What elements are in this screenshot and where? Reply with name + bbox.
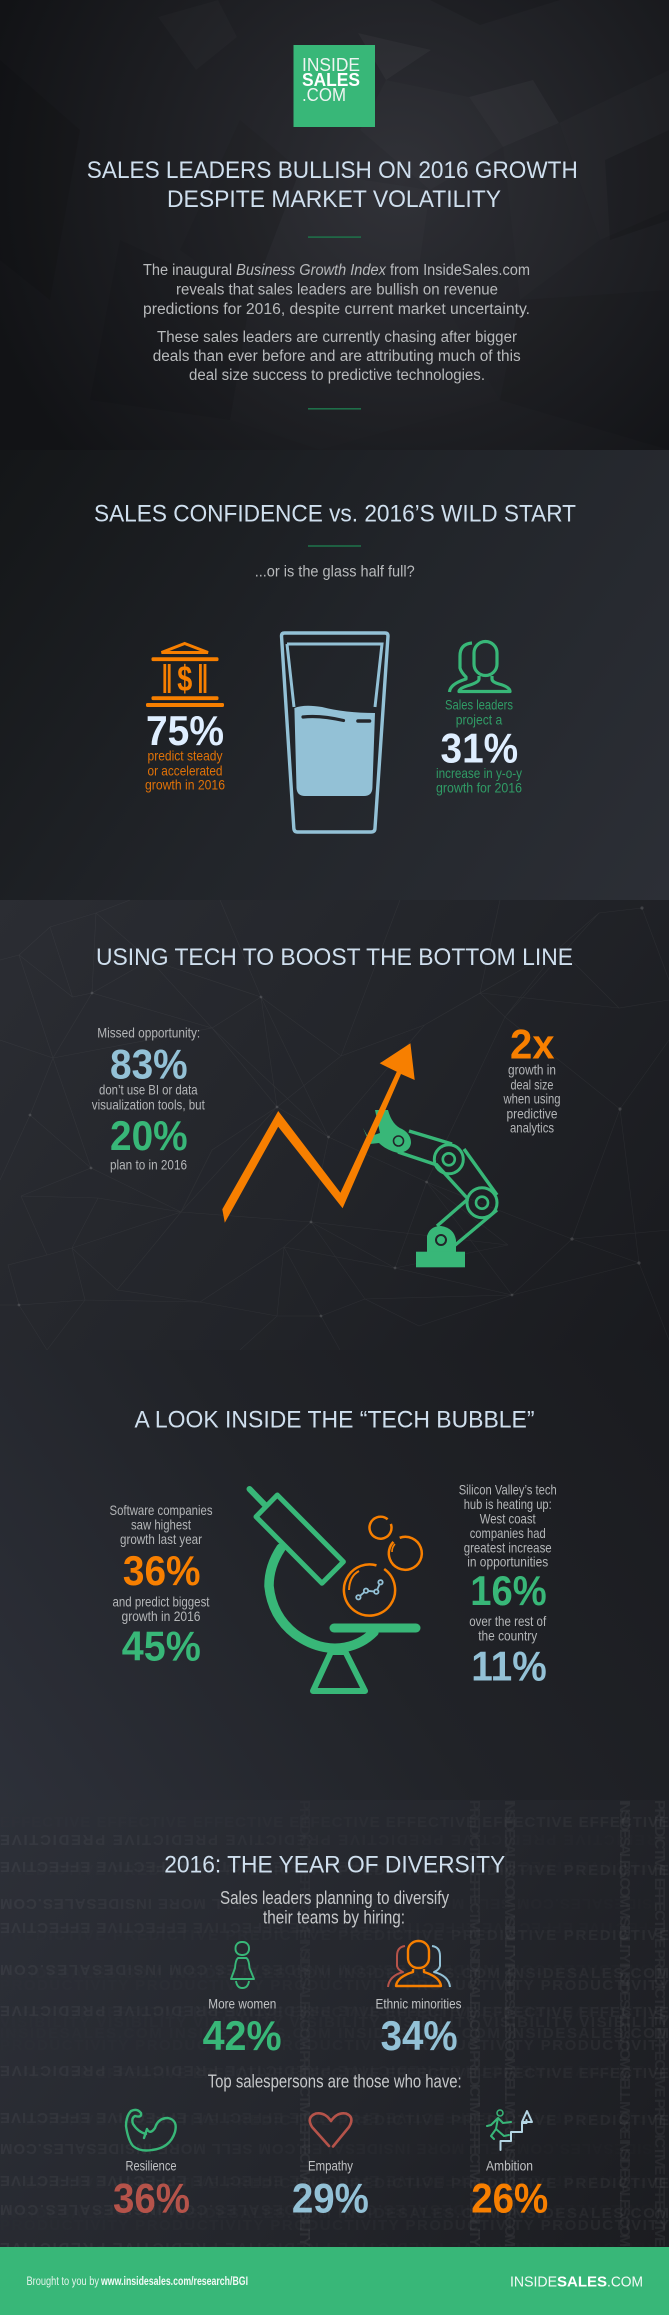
stats: software companies: Software companies [110, 1502, 212, 1518]
stats: silicon valley [459, 1482, 557, 1690]
panel: diversity: INSIDESALES.COM INSIDESALES.COM INSIDESALES.COM INSIDESALES.COM [0, 2025, 669, 2042]
panel: diversity: PREDICTIVE PREDICTIVE PREDICTIVE PREDICTIVE PREDICTIVE PREDICTIVE [0, 1927, 669, 1944]
stat: 75%: 75% [146, 707, 224, 754]
panel: diversity: INSIDESALES.COM INSIDESALES.COM INSIDESALES.COM INSIDESALES.COM [0, 1965, 669, 1982]
logo: INSIDE [302, 55, 360, 75]
panel: using tech [0, 900, 669, 1350]
panel: diversity: EFFECTIVE EFFECTIVE EFFECTIVE EFFECTIVE EFFECTIVE EFFECTIVE EFFECTIVE [0, 2172, 669, 2189]
stats: missed opportunity: 20% [110, 1112, 188, 1159]
stat: ambition: Ambition [486, 2158, 533, 2174]
stat: ethnic minorities [376, 1996, 462, 2059]
stat: empathy: Empathy [308, 2158, 353, 2174]
panel: diversity: INSIDESALES.COM VISIBILITY INSIDESALES.COM SELL MORE INSIDESALES.COM [616, 1800, 633, 2247]
panel: diversity: PRODUCTIVITY PRODUCTIVITY PRODUCTIVITY PRODUCTIVITY PRODUCTIVITY [0, 2217, 669, 2234]
footer logo: .COM [607, 2274, 643, 2291]
stat: 31% [436, 697, 522, 796]
intro: hiring [220, 1888, 449, 1927]
panel: tech bubble [0, 1350, 669, 1800]
stats: missed opportunity: visualization tools, but [92, 1096, 205, 1112]
stat: 75%: predict steady [148, 748, 222, 764]
icon: growth arrow [222, 1043, 415, 1223]
panel: diversity: EFFECTIVE EFFECTIVE EFFECTIVE EFFECTIVE EFFECTIVE EFFECTIVE EFFECTIVE [0, 1858, 669, 1875]
stats: silicon valley: 11% [471, 1643, 547, 1690]
icon: bank [146, 644, 224, 707]
stat: ambition [471, 2158, 548, 2221]
panel: diversity: PREDICTIVE PREDICTIVE PREDICTIVE PREDICTIVE PREDICTIVE PREDICTIVE [0, 2062, 669, 2079]
title: SALES LEADERS BULLISH ON 2016 GROWTH [87, 157, 578, 184]
stats: silicon valley: hub is heating up: [464, 1496, 552, 1512]
stat: more women: 42% [203, 2012, 282, 2059]
credit line: Brought to you by [26, 2276, 99, 2288]
panel: diversity: PRODUCTIVITY PRODUCTIVITY PRODUCTIVITY PRODUCTIVITY PRODUCTIVITY [0, 1977, 669, 1994]
stat: 2x [503, 1020, 560, 1136]
panel: diversity: PREDICTIVE EFFECTIVE INSIDESALES.COM PREDICTIVE EFFECTIVE VISIBILITY [466, 1800, 483, 2247]
logo: SALES [302, 70, 360, 90]
panel: diversity: PREDICTIVE PREDICTIVE PREDICTIVE PREDICTIVE PREDICTIVE PREDICTIVE [0, 2112, 669, 2129]
stat: 31%: increase in y-o-y [436, 765, 522, 781]
stats: silicon valley: over the rest of [469, 1613, 546, 1629]
stats: software companies: growth last year [120, 1531, 202, 1547]
panel: diversity: INSIDESALES.COM SELL MORE INSIDESALES.COM SELL MORE INSIDESALES.COM [0, 2140, 669, 2157]
intro: hiring: their teams by hiring: [263, 1907, 405, 1927]
intro text: predictions for 2016, despite current market uncertainty. [143, 301, 530, 318]
stats: silicon valley: companies had [470, 1525, 546, 1541]
panel: diversity [0, 1800, 669, 2256]
stat: 2x: 2x [510, 1020, 555, 1067]
intro text: reveals that sales leaders are bullish on revenue [176, 282, 498, 299]
title [87, 157, 578, 213]
panel: diversity: PREDICTIVE PREDICTIVE PREDICTIVE PREDICTIVE PREDICTIVE PREDICTIVE [0, 1862, 669, 1879]
stats: software companies: 45% [122, 1623, 201, 1670]
icon: sales leaders [450, 642, 510, 692]
panel: sales confidence [0, 450, 669, 900]
panel: diversity: INSIDESALES.COM INSIDESALES.COM INSIDESALES.COM INSIDESALES.COM [0, 2205, 669, 2222]
stat: ethnic minorities: Ethnic minorities [376, 1996, 462, 2012]
panel: diversity: PRODUCTIVITY PRODUCTIVITY PRODUCTIVITY PRODUCTIVITY PRODUCTIVITY [0, 2037, 669, 2054]
heading: tech bubble: A LOOK INSIDE THE “TECH BUBBLE” [134, 1406, 535, 1433]
intro text: deal size success to predictive technologies. [189, 367, 485, 384]
panel: diversity: EFFECTIVE EFFECTIVE EFFECTIVE EFFECTIVE EFFECTIVE EFFECTIVE EFFECTIVE [0, 2065, 669, 2082]
credit line [26, 2276, 248, 2288]
stats: silicon valley: the country [478, 1628, 537, 1644]
stat: 2x: when using [503, 1091, 560, 1107]
stats: silicon valley: Silicon Valley’s tech [459, 1482, 557, 1498]
stat: 31%: 31% [440, 724, 518, 771]
stats: silicon valley: West coast [480, 1510, 536, 1526]
panel: diversity: PREDICTIVE PREDICTIVE PREDICTIVE PREDICTIVE PREDICTIVE PREDICTIVE [0, 1831, 669, 1848]
stats: software companies: growth in 2016 [122, 1608, 201, 1624]
stat: 2x: growth in [508, 1062, 556, 1078]
stats: missed opportunity: 83% [110, 1040, 188, 1088]
icon: half full glass [282, 633, 388, 832]
stats: missed opportunity: Missed opportunity: [97, 1024, 200, 1040]
stat: empathy [292, 2158, 369, 2221]
stats: software companies: 36% [123, 1547, 200, 1594]
heading: sales confidence: SALES CONFIDENCE vs. 2016’S WILD START [94, 500, 576, 528]
icon: woman [231, 1942, 254, 1988]
stat: resilience [113, 2158, 190, 2221]
stat: 75% [145, 707, 225, 793]
icon: bank: $ [177, 658, 192, 699]
footer logo: SALES [557, 2274, 607, 2291]
subheading: top salespersons: Top salespersons are those who have: [208, 2071, 462, 2091]
stat: 2x: predictive [506, 1105, 558, 1121]
panel: diversity: EFFECTIVE EFFECTIVE EFFECTIVE EFFECTIVE EFFECTIVE EFFECTIVE EFFECTIVE [0, 2004, 669, 2021]
panel: diversity: PREDICTIVE PREDICTIVE PREDICTIVE PREDICTIVE PREDICTIVE PREDICTIVE [0, 2239, 669, 2256]
stats: silicon valley: greatest increase [464, 1539, 552, 1555]
stats: missed opportunity [92, 1024, 205, 1172]
panel: diversity: PREDICTIVE PREDICTIVE PREDICTIVE PREDICTIVE PREDICTIVE PREDICTIVE [0, 2002, 669, 2019]
panel: diversity: INSIDESALES.COM INSIDESALES.COM INSIDESALES.COM INSIDESALES.COM [0, 1961, 669, 1978]
icon: ethnic minorities [388, 1941, 450, 1987]
subheading: ...or is the glass half full? [255, 564, 415, 581]
panel: diversity: INSIDESALES.COM SELL MORE INSIDESALES.COM SELL MORE INSIDESALES.COM [0, 1895, 669, 1912]
panel: diversity: PREDICTIVE PREDICTIVE PREDICTIVE PREDICTIVE PREDICTIVE PREDICTIVE [0, 2175, 669, 2192]
stats: silicon valley: 16% [470, 1567, 547, 1614]
stat: resilience: 36% [113, 2174, 190, 2221]
panel: diversity: PREDICTIVE EFFECTIVE INSIDESALES.COM PREDICTIVE EFFECTIVE VISIBILITY [296, 1800, 313, 2247]
intro text [143, 262, 530, 384]
panel: hero [0, 0, 669, 450]
stat: more women: More women [208, 1996, 276, 2012]
stats: software companies [110, 1502, 212, 1670]
intro text: These sales leaders are currently chasing after bigger [157, 329, 517, 346]
intro text: The inaugural Business Growth Index from InsideSales.com [143, 262, 530, 279]
panel: diversity: PREDICTIVE EFFECTIVE PREDICTIVE EFFECTIVE PREDICTIVE EFFECTIVE [651, 1800, 668, 2247]
icon: muscle [126, 2110, 176, 2150]
heading: diversity: 2016: THE YEAR OF DIVERSITY [164, 1852, 505, 1879]
stat: 75%: growth in 2016 [145, 777, 225, 793]
panel: diversity: INSIDESALES.COM INSIDESALES.COM INSIDESALES.COM INSIDESALES.COM [0, 2201, 669, 2218]
panel: diversity: VISIBILITY VISIBILITY VISIBILITY VISIBILITY VISIBILITY VISIBILITY VISIBILITY [0, 2014, 669, 2031]
stat: ethnic minorities: 34% [381, 2012, 458, 2059]
intro text: deals than ever before and are attributing much of this [153, 348, 521, 365]
stat: 31%: growth for 2016 [436, 780, 522, 796]
stat: 31%: Sales leaders [445, 697, 513, 713]
stats: software companies: and predict biggest [112, 1594, 210, 1610]
stat: 31%: project a [456, 711, 502, 727]
icon: robot arm [363, 1110, 497, 1267]
icon: microscope [250, 1489, 426, 1691]
icon: ambition stairs [487, 2110, 532, 2150]
panel: diversity: INSIDESALES.COM VISIBILITY INSIDESALES.COM SELL MORE INSIDESALES.COM [501, 1800, 518, 2247]
icon: heart [310, 2113, 351, 2146]
stat: ambition: 26% [471, 2174, 548, 2221]
footer logo [510, 2274, 643, 2291]
stats: silicon valley: in opportunities [467, 1554, 548, 1570]
footer [0, 2247, 669, 2315]
stat: resilience: Resilience [126, 2158, 177, 2174]
stats: missed opportunity: plan to in 2016 [110, 1156, 187, 1172]
footer logo: INSIDE [510, 2274, 557, 2291]
stats: software companies: saw highest [131, 1517, 191, 1533]
stat: 2x: analytics [510, 1120, 554, 1136]
stat: 75%: or accelerated [148, 762, 222, 778]
panel: diversity: EFFECTIVE EFFECTIVE EFFECTIVE EFFECTIVE EFFECTIVE EFFECTIVE EFFECTIVE [0, 1919, 669, 1936]
panel: diversity: EFFECTIVE EFFECTIVE EFFECTIVE EFFECTIVE EFFECTIVE EFFECTIVE EFFECTIVE [0, 2109, 669, 2126]
heading: using tech: USING TECH TO BOOST THE BOTTOM LINE [96, 944, 573, 971]
panel: diversity: EFFECTIVE EFFECTIVE EFFECTIVE EFFECTIVE EFFECTIVE EFFECTIVE EFFECTIVE [0, 1814, 669, 1831]
stat: empathy: 29% [292, 2174, 369, 2221]
stats: missed opportunity: don’t use BI or data [99, 1082, 198, 1098]
intro: hiring: Sales leaders planning to diversify [220, 1888, 449, 1908]
logo: .COM [302, 85, 346, 105]
logo [294, 45, 375, 127]
title: DESPITE MARKET VOLATILITY [167, 186, 501, 213]
credit line: www.insidesales.com/research/BGI [100, 2276, 248, 2288]
stat: 2x: deal size [510, 1076, 554, 1092]
